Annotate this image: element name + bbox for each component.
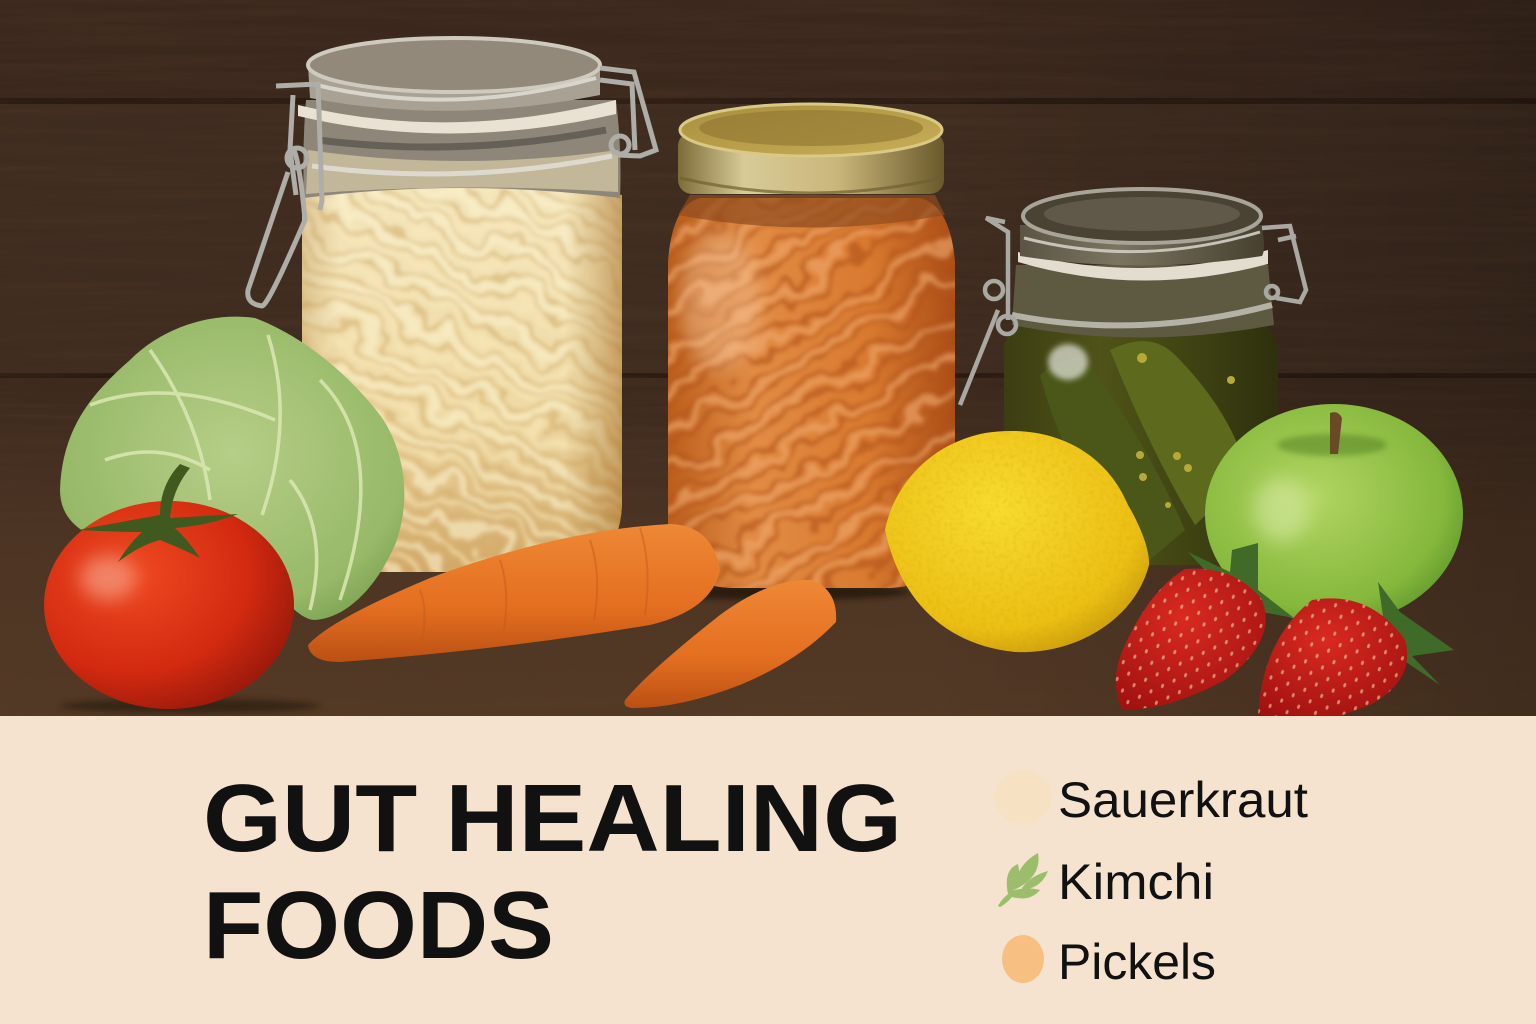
cabbage [60,317,404,620]
sauerkraut jar [245,36,659,572]
jar clasp: right wire [1262,226,1306,302]
pickle: right [1110,341,1240,525]
title: FOODS [203,872,554,979]
gold lid [678,104,944,194]
jar clasp: left wire bail [248,84,322,306]
legend icon: kimchi [998,853,1048,907]
legend label: Kimchi: Kimchi [1058,854,1214,910]
legend [994,770,1308,990]
legend label: Pickels: Pickels [1058,934,1216,990]
lemon [880,425,1155,657]
jar clasp: left wire [960,218,1016,405]
apple [1205,404,1463,624]
small carrot [624,580,836,708]
kimchi jar [668,102,955,588]
right strawberry [1258,582,1454,716]
legend label: Sauerkraut: Sauerkraut [1058,772,1308,828]
bottom panel [0,716,1536,1024]
title: GUT HEALING [203,765,902,872]
brine bubbles [1136,353,1235,508]
legend icon: pickles [1002,935,1044,983]
glass glare [1048,344,1088,380]
left strawberry [1116,543,1294,709]
pickle: left [1040,359,1185,560]
legend icon: sauerkraut [994,770,1052,824]
jar clasp: right wire bail [600,68,656,156]
pickle jar [960,189,1306,565]
large carrot [308,524,720,662]
tomato [44,464,294,709]
photo background: wooden wall and table [0,0,1536,716]
